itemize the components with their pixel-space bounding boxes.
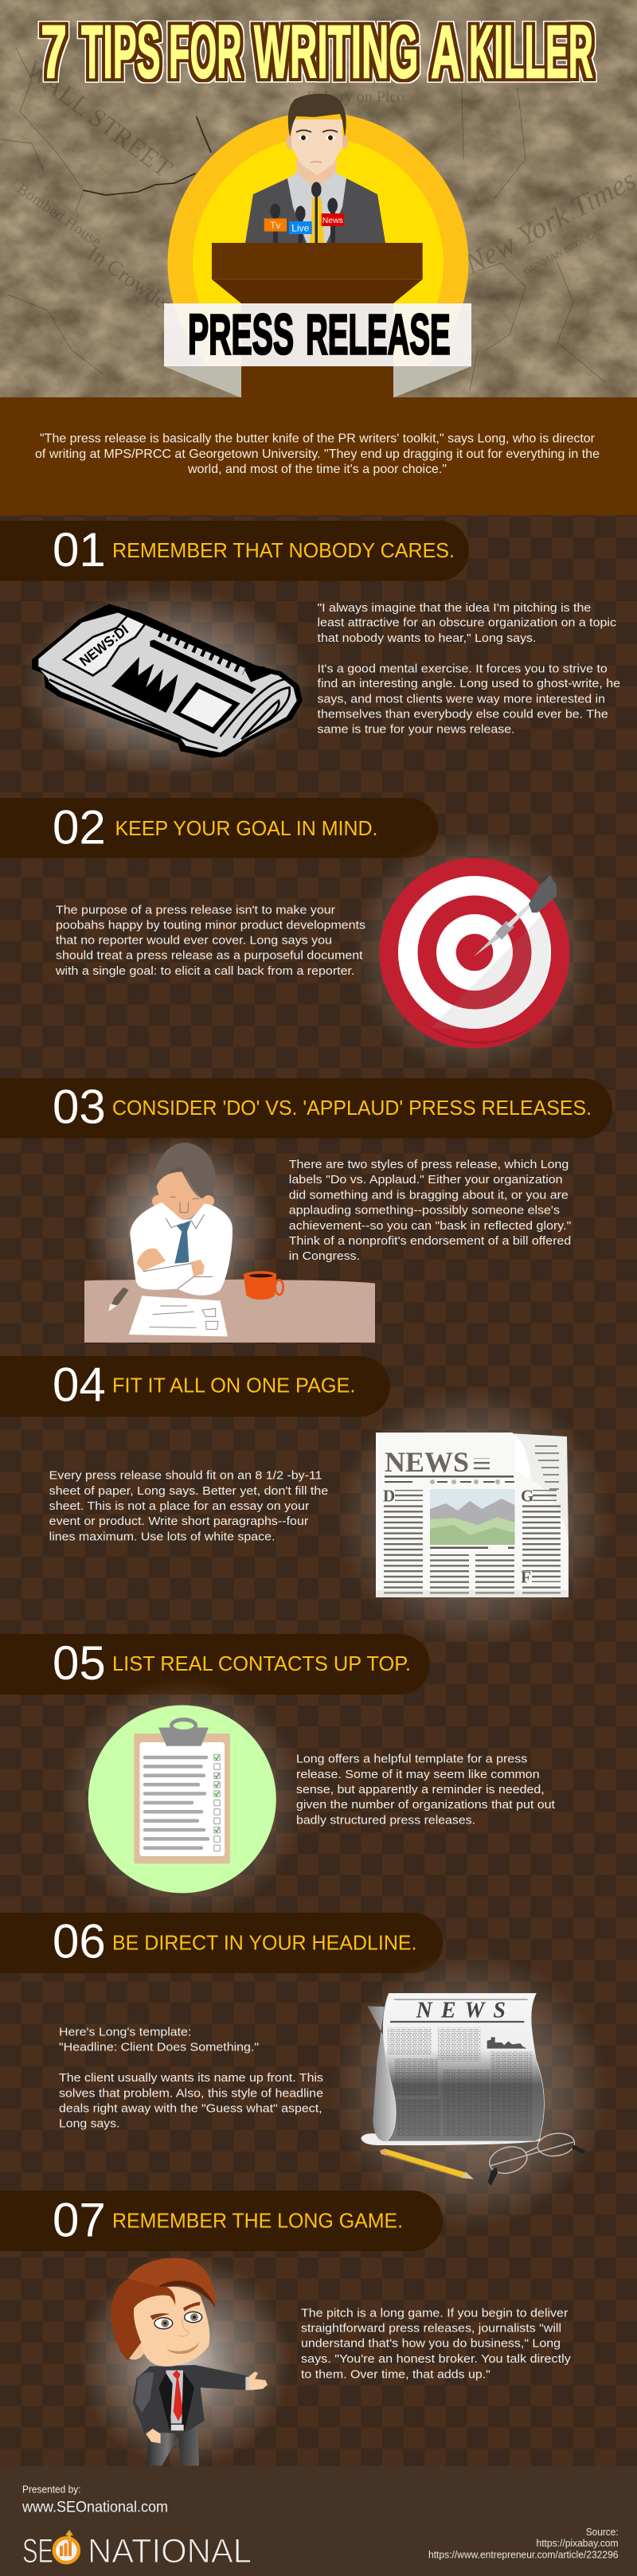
microphones with labels: Live	[291, 223, 310, 234]
icon: clipboard checklist	[88, 1705, 276, 1893]
tip 05 header: LIST REAL CONTACTS UP TOP.	[112, 1653, 411, 1675]
tip 01 header: REMEMBER THAT NOBODY CARES.	[112, 540, 455, 562]
tip 06 header	[0, 1913, 443, 1973]
hero illustration: speaker at podium	[167, 94, 468, 413]
logo: SE	[22, 2532, 53, 2570]
tip 07 text	[301, 2307, 572, 2381]
press release banner	[164, 303, 471, 366]
press release banner: RELEASE	[306, 304, 451, 366]
tip 03 text: achievement--so you can "bask in reflected glory."	[289, 1220, 571, 1233]
hero: aged newspaper wall background: In Crowded	[84, 240, 181, 319]
tip 06 text: "Headline: Client Does Something."	[59, 2042, 259, 2054]
intro quote	[35, 432, 600, 476]
logo: NATIONAL	[88, 2532, 252, 2570]
tip 03 text: applauding something--possibly someone else's	[289, 1205, 560, 1218]
title: WRITING	[254, 10, 419, 94]
tip 06 text	[59, 2026, 323, 2131]
ribbon flaps	[164, 366, 471, 398]
page background: checker pattern	[0, 510, 637, 2469]
icon: news page: F	[521, 1567, 531, 1586]
tip 05 text: Long offers a helpful template for a press	[296, 1753, 527, 1766]
tip 03 text: did something and is bragging about it, or you are	[289, 1189, 569, 1202]
title: A	[431, 10, 461, 94]
tip 02 text: with a single goal: to elicit a call back from a reporter.	[55, 965, 354, 978]
tip 03 text: in Congress.	[289, 1250, 360, 1263]
tip 02 header: KEEP YOUR GOAL IN MIND.	[115, 818, 377, 840]
icon: curved news sheet with pencil and glasses: NEWS	[416, 1998, 506, 2023]
podium	[212, 243, 423, 403]
intro quote: "The press release is basically the butter knife of the PR writers' toolkit," says Long, who is director	[40, 432, 595, 446]
tip 03 header: 03	[53, 1081, 106, 1134]
tip 04 header	[0, 1356, 390, 1417]
tip 04 text: lines maximum. Use lots of white space.	[49, 1530, 275, 1543]
tip 01 text: find an interesting angle. Long used to ghost-write, he	[317, 678, 620, 690]
tip 05 header: 05	[53, 1636, 106, 1690]
tip 04 text: Every press release should fit on an 8 1/2 -by-11	[49, 1470, 322, 1483]
glow behind newspaper and glasses	[330, 1951, 609, 2230]
tip 07 text: The pitch is a long game. If you begin to deliver	[301, 2307, 568, 2320]
glow behind clipboard	[59, 1675, 306, 1922]
tip 06 header: 06	[53, 1915, 106, 1968]
tip 01 text: themselves than everybody else could ever be. The	[317, 708, 608, 721]
glow behind businessman	[77, 2254, 292, 2469]
title: 7	[41, 10, 67, 94]
microphones with labels	[264, 182, 344, 244]
microphones with labels: Tv	[270, 220, 280, 231]
icon: news page: D	[383, 1487, 395, 1506]
tip 06 text: deals right away with the "Guess what" aspect,	[59, 2102, 322, 2115]
hero: aged newspaper wall background: GUNMAN BROUGHT	[522, 224, 608, 277]
sources: Source:	[586, 2526, 619, 2538]
tip 01 text: says, and most clients were way more interested in	[317, 693, 605, 706]
presented by	[21, 2484, 168, 2516]
intro quote: world, and most of the time it's a poor choice."	[187, 463, 447, 476]
icon: rolled newspaper: NEWS:DI	[76, 622, 131, 669]
hero: aged newspaper wall background: Bombed House	[14, 180, 104, 251]
presented by: www.SEOnational.com	[21, 2499, 168, 2516]
yellow circles	[167, 112, 468, 413]
sources	[428, 2526, 619, 2560]
tip 03 text: labels "Do vs. Applaud." Either your organization	[289, 1174, 563, 1186]
illustration: man at desk	[84, 1143, 375, 1343]
hero: aged newspaper wall background: New York Times	[459, 163, 637, 281]
tip 04 text: event or product. Write short paragraphs--four	[49, 1515, 308, 1528]
tip 06 text: solves that problem. Also, this style of headline	[59, 2087, 323, 2100]
glow behind worried man	[85, 1135, 276, 1326]
tip 02 text: should treat a press release as a purposeful document	[56, 949, 363, 962]
speaker figure	[245, 94, 385, 243]
tip 02 text: The purpose of a press release isn't to make your	[56, 904, 335, 917]
tip 07 text: to them. Over time, that adds up."	[301, 2368, 490, 2381]
press release banner: PRESS	[188, 304, 294, 366]
glow behind news page	[334, 1386, 613, 1648]
footer panel	[0, 2466, 637, 2576]
tip 03 text: There are two styles of press release, which Long	[289, 1159, 569, 1171]
tip 03 header	[0, 1078, 612, 1139]
tip 06 text: Here's Long's template:	[59, 2026, 191, 2039]
icon: curved news sheet with pencil and glasses	[361, 1993, 585, 2186]
microphones with labels: News	[322, 216, 343, 225]
title	[41, 10, 593, 94]
tip 07 text: straightforward press releases, journalists "will	[301, 2323, 561, 2336]
illustration: businessman presenting	[111, 2257, 268, 2466]
tip 05 text: badly structured press releases.	[296, 1814, 475, 1827]
tip 03 header: CONSIDER 'DO' VS. 'APPLAUD' PRESS RELEASES.	[112, 1097, 592, 1120]
tip 01 text: "I always imagine that the idea I'm pitching is the	[317, 602, 591, 615]
hero: aged newspaper wall background: Bakery on Pico	[307, 88, 404, 106]
tip 02 text	[55, 904, 365, 978]
tip 05 text: sense, but apparently a reminder is needed,	[296, 1784, 545, 1796]
tip 04 text	[49, 1470, 328, 1543]
tip 07 header	[0, 2191, 443, 2251]
icon: news page	[376, 1433, 569, 1597]
tip 07 text: says. "You're an honest broker. You talk directly	[301, 2353, 572, 2366]
intro band	[0, 397, 637, 515]
icon: dartboard target with dart	[379, 858, 570, 1048]
icon: news page: NEWS	[385, 1446, 469, 1478]
tip 05 text	[296, 1753, 555, 1827]
tip 07 text: understand that's how you do business," Long	[301, 2338, 561, 2351]
presented by: Presented by:	[22, 2484, 81, 2496]
tip 05 header	[0, 1634, 430, 1695]
title: TIPS	[81, 10, 161, 94]
tip 05 text: given the number of organizations that put out	[296, 1799, 555, 1812]
sources: https://www.entrepreneur.com/article/232296	[428, 2548, 618, 2560]
tip 07 header: 07	[53, 2194, 106, 2247]
tip 06 text: The client usually wants its name up front. This	[59, 2072, 323, 2085]
tip 01 text: least attractive for an obscure organization on a topic	[317, 617, 616, 630]
logo	[22, 2530, 252, 2570]
tip 06 header: BE DIRECT IN YOUR HEADLINE.	[112, 1932, 417, 1954]
tip 04 header: 04	[53, 1358, 106, 1411]
sources: https://pixabay.com	[537, 2537, 618, 2549]
tip 01 text	[317, 602, 620, 736]
tip 02 header	[0, 798, 438, 858]
tip 04 text: sheet. This is not a place for an essay on your	[49, 1500, 309, 1513]
tip 01 header	[0, 521, 469, 581]
tip 04 text: sheet of paper, Long says. Better yet, don't fill the	[49, 1485, 328, 1498]
glow behind rolled newspaper	[18, 587, 312, 778]
hero: aged newspaper wall background	[0, 0, 637, 398]
tip 01 text: that nobody wants to hear," Long says.	[317, 632, 537, 645]
tip 04 header: FIT IT ALL ON ONE PAGE.	[112, 1375, 355, 1397]
icon: news page: G	[521, 1487, 533, 1506]
tip 01 text: It's a good mental exercise. It forces you to strive to	[317, 663, 608, 675]
glow behind target	[351, 829, 598, 1076]
hero: aged newspaper wall background: WALL STREET	[20, 56, 177, 184]
tip 07 header: REMEMBER THE LONG GAME.	[112, 2211, 403, 2233]
tip 06 text: Long says.	[59, 2118, 119, 2131]
intro quote: of writing at MPS/PRCC at Georgetown University. "They end up dragging it out for everything in the	[35, 448, 600, 461]
icon: rolled newspaper	[32, 604, 303, 758]
tip 05 text: release. Some of it may seem like common	[296, 1769, 540, 1781]
tip 03 text	[289, 1159, 571, 1263]
tip 03 text: Think of a nonprofit's endorsement of a bill offered	[289, 1235, 571, 1248]
tip 01 header: 01	[53, 523, 106, 577]
tip 01 text: same is true for your news release.	[317, 723, 514, 736]
tip 02 text: that no reporter would ever cover. Long says you	[56, 935, 332, 948]
title: FOR	[169, 10, 242, 94]
tip 02 text: poobahs happy by touting minor product developments	[56, 920, 365, 932]
tip 02 header: 02	[53, 801, 106, 854]
